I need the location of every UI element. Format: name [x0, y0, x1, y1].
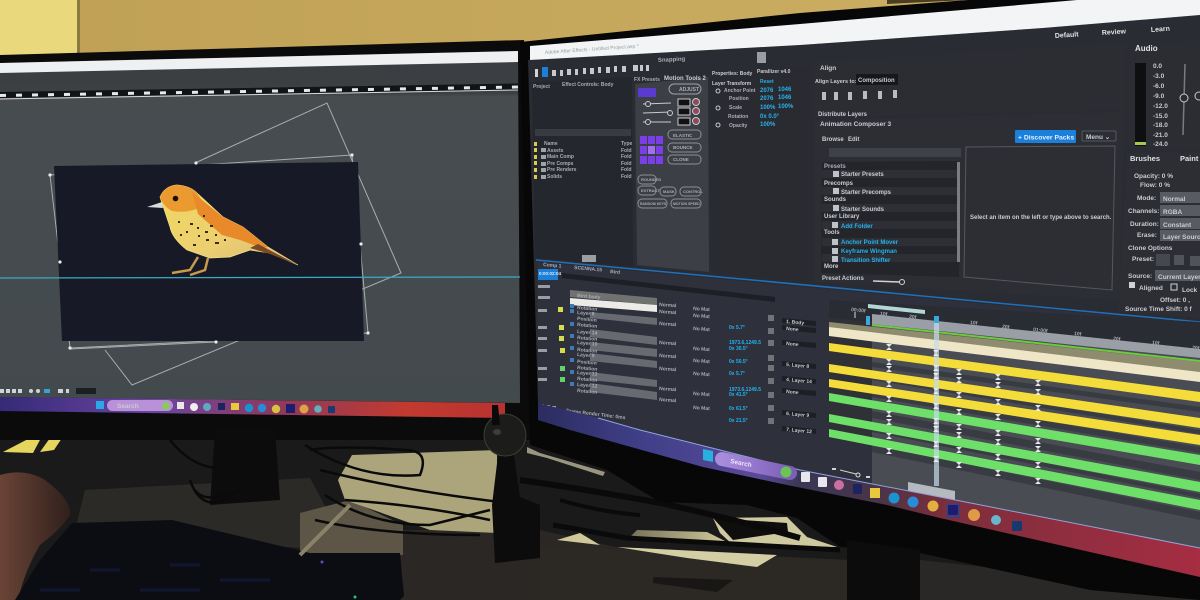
right monitor toolbar: Review	[1102, 28, 1127, 37]
panel: audio: -18.0	[1153, 122, 1168, 129]
panel: project: Fold	[621, 167, 632, 173]
panel: brushes and paint: Duration:	[1130, 221, 1159, 228]
panel: motion tools: ROUNDED	[641, 177, 661, 182]
panel: motion tools: ADJUST	[679, 87, 699, 93]
panel: align: Align Layers to:	[815, 79, 857, 85]
menu button	[1082, 131, 1116, 141]
composition frame	[54, 162, 364, 341]
panel: brushes and paint: Channels:	[1128, 208, 1159, 215]
search pill	[722, 458, 792, 478]
layer rows: 1. Body	[786, 319, 805, 327]
layer rows: 6. Layer 9	[786, 411, 810, 419]
motion tools sliders	[643, 98, 700, 125]
panel: align: Distribute Layers	[818, 112, 868, 118]
layer rows: No Mat	[693, 346, 710, 353]
panel: audio: -9.0	[1153, 93, 1165, 100]
right monitor toolbar: Learn	[1151, 26, 1170, 34]
search field	[829, 148, 961, 157]
panel: properties: 100%	[760, 122, 776, 128]
work area bar	[868, 304, 925, 314]
layer rows: Normal	[659, 366, 677, 373]
panel: audio: 0.0	[1153, 63, 1162, 70]
menu button: Menu ⌄	[1086, 134, 1110, 141]
panel: brushes and paint: Current Layer	[1158, 274, 1200, 281]
time ruler: 20f	[1192, 345, 1200, 352]
right monitor toolbar: Snapping	[658, 57, 686, 64]
layer rows: Normal	[659, 321, 677, 328]
status bar text: Frame Render Time: 0ms	[566, 408, 626, 421]
layer rows: 0x 61.5°	[729, 406, 748, 412]
layer rows: Normal	[659, 309, 677, 316]
panel: motion tools: ELASTIC	[673, 133, 693, 138]
layer rows: Rotation	[577, 322, 598, 330]
panel: brushes and paint: Source:	[1128, 273, 1152, 280]
green thin line	[872, 325, 1200, 361]
composition tabs: SCENNA.15	[574, 265, 603, 273]
panel: properties: Position	[729, 96, 749, 102]
layer rows: 0x 21.5°	[729, 418, 748, 424]
rotated layer outlines	[50, 103, 401, 385]
composition tabs	[538, 262, 775, 302]
panel: properties: 2076	[760, 88, 774, 94]
panel: project: Pre Comps	[547, 161, 574, 167]
preset list: More	[824, 264, 839, 270]
panel: animation composer: Preset Actions	[822, 276, 864, 282]
panel: motion tools: MASK	[663, 189, 675, 194]
panel: motion tools: CLONE	[673, 157, 689, 162]
left monitor taskbar	[0, 397, 505, 418]
composition tabs: 0:00:02:04	[539, 271, 562, 276]
layer rows: No Mat	[693, 405, 710, 412]
cream layer bar	[829, 327, 1200, 382]
panel: properties: 2076	[760, 96, 774, 102]
layer rows: Rotation	[577, 335, 598, 343]
preset list: Starter Sounds	[841, 207, 885, 213]
right monitor stand	[847, 540, 920, 600]
panel: properties: Opacity	[729, 123, 748, 129]
panel: properties: Scale	[729, 105, 742, 111]
panel: brushes and paint: Mode:	[1137, 195, 1156, 202]
sunlit patch: behind left monitor	[3, 438, 497, 555]
blue panel separator line	[536, 260, 1200, 322]
panel: audio: -24.0	[1153, 141, 1168, 148]
layer rows: Rotation	[577, 347, 598, 355]
panel: project: Project	[533, 84, 550, 90]
panel: brushes and paint: Source Time Shift: 0 f	[1125, 306, 1193, 313]
layer rows: Layer 10	[577, 340, 598, 348]
panel: properties: 1046	[778, 87, 792, 93]
preset list: Keyframe Wingman	[841, 249, 897, 255]
preset list: Starter Presets	[841, 172, 884, 178]
panel: properties: 0x 0.0°	[760, 114, 780, 120]
layer rows: No Mat	[693, 313, 710, 320]
grey layer bar	[872, 314, 1200, 358]
layer rows: No Mat	[693, 371, 710, 378]
sunlit patches: under right monitor	[527, 447, 837, 592]
panel: align	[815, 42, 1127, 118]
panel: properties: Parallizer v4.0	[757, 69, 791, 75]
layer rows: Normal	[659, 353, 677, 360]
green layer bars	[829, 393, 1200, 510]
panel: project: Main Comp	[547, 154, 574, 160]
right monitor title bar: Adobe After Effects - Untitled Project.aep *	[545, 43, 639, 56]
right monitor taskbar	[538, 403, 1200, 577]
layer rows: Layer 12	[577, 382, 598, 390]
preset list: User Library	[824, 214, 860, 220]
panel: brushes and paint: Clone Options	[1128, 245, 1173, 252]
status bar text: Ready	[546, 417, 562, 426]
time ruler: 20f	[1113, 336, 1121, 343]
layer rows: Rotation	[577, 388, 598, 396]
layer rows: 7. Layer 12	[786, 427, 812, 435]
time ruler: 20f	[909, 314, 917, 321]
layer rows: Rotation	[577, 305, 598, 313]
preset list: Precomps	[824, 181, 854, 187]
preset list	[821, 161, 960, 277]
panel: motion tools	[634, 76, 709, 272]
panel: properties: Rotation	[728, 114, 748, 120]
time ruler: 00:00f	[851, 307, 866, 315]
panel: properties: 100%	[760, 105, 776, 111]
icon: bird illustration	[147, 185, 298, 275]
dark row stripes	[872, 362, 1200, 520]
layer rows: 5. Layer 8	[786, 362, 810, 370]
panel: project: Assets	[547, 148, 564, 154]
panel: project: Fold	[621, 161, 632, 167]
panel: animation composer: Browse	[822, 137, 844, 143]
icon: start button	[703, 449, 713, 462]
playhead	[866, 316, 955, 502]
panel: project	[532, 77, 633, 267]
panel: align: Composition	[858, 78, 895, 84]
panel: properties: 1046	[778, 95, 792, 101]
panel: project: Fold	[621, 148, 632, 154]
layer rows: Normal	[659, 386, 677, 393]
layer rows: Position	[577, 316, 597, 324]
panel: brushes and paint	[1118, 152, 1200, 318]
panel: brushes and paint: Aligned	[1139, 285, 1163, 292]
preset list: Anchor Point Mover	[841, 240, 899, 246]
panel: project: Type	[621, 141, 633, 147]
hand	[0, 472, 70, 600]
panel: audio	[1127, 40, 1200, 150]
layer rows: No Mat	[693, 358, 710, 365]
layer rows: No Mat	[693, 326, 710, 333]
panel: brushes and paint: RGBA	[1163, 209, 1182, 216]
right monitor screen	[528, 15, 1200, 562]
details box	[964, 146, 1115, 290]
right monitor bezel	[520, 0, 1200, 600]
left monitor status icons	[0, 388, 96, 394]
layer rows: Position	[577, 359, 597, 367]
layer rows: 1973.6,1249.5	[729, 340, 761, 346]
panel: audio: -15.0	[1153, 113, 1168, 120]
layer rows: Layer 9	[577, 352, 595, 360]
time ruler	[829, 300, 1200, 354]
preset list: Sounds	[824, 197, 847, 203]
panel: project: Effect Controls: Body	[562, 82, 614, 88]
icon: purple anchor grid	[640, 136, 663, 164]
panel: audio: -12.0	[1153, 103, 1168, 110]
composition tabs: Comp 1	[543, 262, 562, 270]
right monitor title bar	[530, 0, 1200, 60]
discover packs button: + Discover Packs	[1018, 134, 1074, 142]
timeline zoom slider	[832, 468, 870, 478]
wall background	[0, 0, 1200, 60]
panel: audio: Audio	[1135, 44, 1158, 53]
layer rows: 0x 30.5°	[729, 346, 748, 352]
preset list: Tools	[824, 230, 840, 236]
panel: audio: -3.0	[1153, 73, 1165, 80]
right taskbar icons	[703, 449, 1022, 531]
panel: project: Name	[544, 141, 558, 147]
time ruler: 10f	[1074, 331, 1082, 338]
monitor stand left	[210, 430, 280, 505]
desk surface	[0, 430, 1200, 600]
right monitor toolbar	[535, 26, 1170, 77]
selection handles	[48, 153, 370, 350]
layer rows: Normal	[659, 340, 677, 347]
panel: properties	[710, 66, 812, 283]
composition tabs: Bird	[610, 269, 620, 276]
panel: brushes and paint: Opacity: 0 %	[1134, 173, 1173, 180]
time ruler: 10f	[1152, 340, 1160, 347]
panel: motion tools: EXTRACT	[641, 188, 660, 193]
layer rows: 4. Layer 14	[786, 377, 812, 385]
layer rows: 0x 50.5°	[729, 359, 748, 365]
left taskbar icons	[96, 400, 335, 414]
layer rows: Rotation	[577, 376, 598, 384]
dark sliver above right monitor	[887, 0, 967, 4]
layer rows: Normal	[659, 397, 677, 404]
preset list: Starter Precomps	[841, 190, 892, 196]
time ruler: 10f	[880, 311, 888, 318]
timeline tracks	[829, 300, 1200, 548]
panel: motion tools: CONTROL	[683, 189, 703, 194]
layer rows: None	[786, 341, 799, 348]
tan layer band	[829, 322, 1200, 372]
keyframes	[886, 344, 1041, 484]
panel: brushes and paint: Offset: 0 ,	[1160, 297, 1190, 304]
layer rows: 0x 5.7°	[729, 371, 745, 377]
layer rows: Normal	[659, 302, 677, 309]
taskbar top highlight	[598, 418, 1200, 548]
panel: motion tools: MOTION SPEED	[673, 202, 700, 206]
keyboard	[15, 520, 404, 600]
yellow layer bars	[829, 343, 1200, 445]
motion tools buttons	[638, 130, 701, 208]
panel: properties: Anchor Point	[724, 88, 756, 94]
panel: project: Fold	[621, 174, 632, 180]
time ruler: 01:00f	[1033, 327, 1048, 335]
panel: properties: Reset	[760, 79, 774, 85]
time ruler: 20f	[1002, 324, 1010, 331]
panel: motion tools: Motion Tools 2	[664, 76, 707, 82]
layer rows: Rotation	[577, 365, 598, 373]
panel: motion tools: FX Presets	[634, 77, 660, 83]
panel: project: Solids	[547, 174, 562, 180]
panel: align: Align	[820, 65, 836, 72]
right monitor toolbar: Default	[1055, 31, 1079, 40]
panel: animation composer: Edit	[848, 137, 859, 143]
details box: Select an item on the left or type above to search.	[970, 215, 1112, 221]
panel: audio: -21.0	[1153, 132, 1168, 139]
status bar text: GPU	[546, 412, 558, 420]
panel: brushes and paint: Lock	[1182, 287, 1198, 294]
panel: project: Pre Renders	[547, 167, 577, 173]
panel: brushes and paint: Preset:	[1132, 256, 1154, 263]
panel: project: Fold	[621, 154, 632, 160]
left monitor screen	[0, 51, 520, 403]
preset list: Add Folder	[841, 224, 873, 230]
panel: properties: Layer Transform	[712, 81, 752, 87]
panel: audio: -6.0	[1153, 83, 1165, 90]
preset list: Presets	[824, 164, 846, 170]
panel: properties: 100%	[778, 104, 794, 110]
discover packs button	[1015, 130, 1076, 143]
panel: brushes and paint: Erase:	[1137, 232, 1157, 239]
layer rows: None	[786, 326, 799, 333]
layer rows: No Mat	[693, 306, 710, 313]
panel: brushes and paint: Normal	[1163, 196, 1186, 203]
time ruler: 10f	[970, 320, 978, 327]
left taskbar icons: Search	[117, 403, 139, 410]
panel: motion tools: BOUNCE	[673, 145, 693, 150]
guide line	[0, 277, 520, 278]
desk cables	[170, 440, 840, 555]
layer rows: Layer 13	[577, 370, 598, 378]
layer rows: 0x 5.7°	[729, 325, 745, 331]
left monitor	[0, 40, 532, 440]
layer rows: 0x 41.5°	[729, 392, 748, 398]
layer rows: No Mat	[693, 391, 710, 398]
layer rows: None	[786, 389, 799, 396]
icon: glass sphere on post	[484, 405, 540, 563]
panel: brushes and paint: Constant	[1163, 222, 1192, 229]
timeline panel	[537, 262, 1200, 560]
left monitor title bar	[0, 51, 518, 73]
panel: brushes and paint: Brushes	[1130, 154, 1160, 163]
layer rows	[538, 285, 816, 435]
layer rows: Bird body	[577, 293, 601, 301]
panel: brushes and paint: Paint	[1180, 154, 1199, 163]
search pill: Search	[730, 458, 752, 469]
panel: brushes and paint: Flow: 0 %	[1140, 182, 1170, 189]
panel: properties: Properties: Body	[712, 71, 753, 77]
status bar text	[540, 404, 626, 426]
panel: animation composer: Animation Composer 3	[820, 121, 892, 128]
panel: animation composer	[815, 112, 1125, 300]
layer rows: Layer 14	[577, 329, 598, 337]
panel: motion tools: RANDOM KEYS	[640, 202, 667, 206]
preset list: Transition Shifter	[841, 258, 891, 264]
left monitor ruler	[0, 86, 518, 99]
layer rows: 1973.6,1249.5	[729, 387, 761, 393]
layer rows: Layer 8	[577, 310, 595, 318]
